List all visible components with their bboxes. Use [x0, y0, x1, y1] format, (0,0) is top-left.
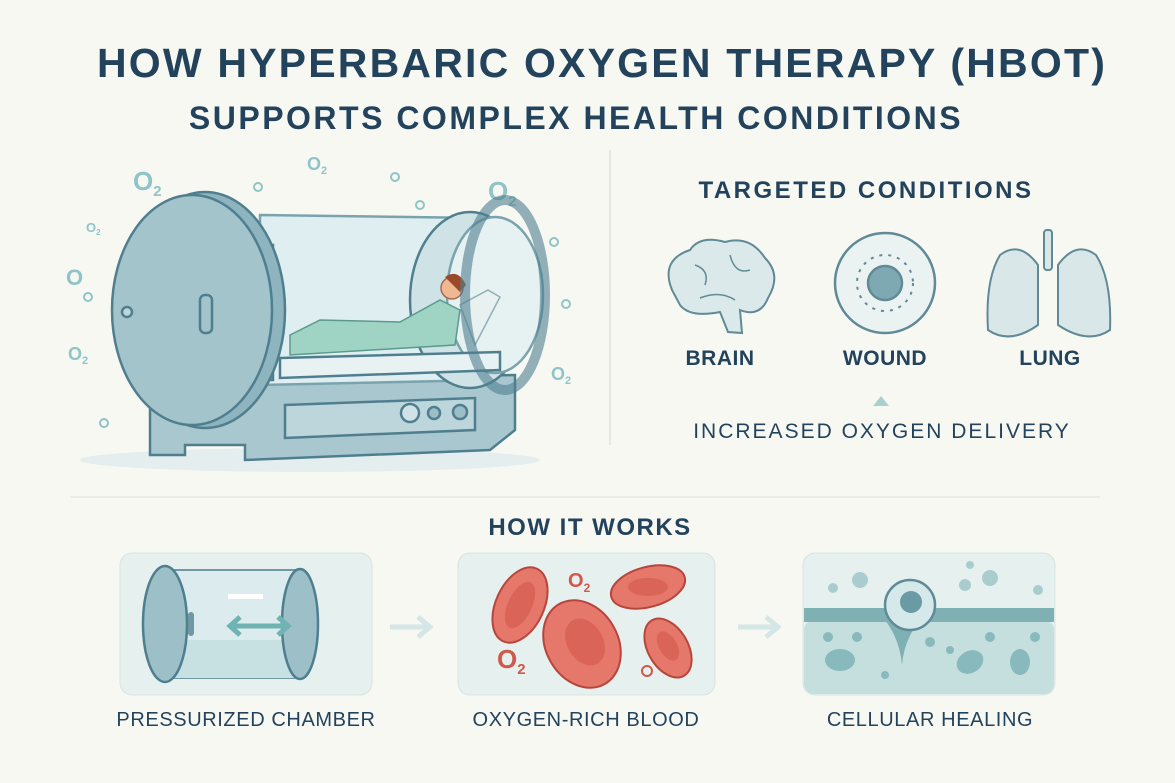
card: oxygen-rich blood	[458, 553, 715, 702]
card: pressurized chamber	[120, 553, 372, 695]
divider vertical	[609, 150, 611, 445]
illustration: hyperbaric chamber: O	[86, 220, 96, 235]
arrow 1	[390, 617, 430, 637]
rings and door	[465, 200, 545, 390]
divider horizontal	[70, 496, 1100, 498]
illustration: hyperbaric chamber: 2	[153, 183, 162, 200]
icon: wound	[835, 233, 935, 333]
card: oxygen-rich blood: O	[497, 644, 517, 674]
label: wound: WOUND	[843, 347, 927, 370]
illustration: hyperbaric chamber: O	[66, 265, 83, 290]
label: oxygen-rich blood: OXYGEN-RICH BLOOD	[473, 709, 699, 731]
heading: how it works: HOW IT WORKS	[488, 514, 692, 541]
illustration: hyperbaric chamber: 2	[321, 165, 327, 177]
card: oxygen-rich blood: 2	[584, 581, 591, 595]
illustration: hyperbaric chamber: O	[314, 262, 328, 282]
illustration: hyperbaric chamber: O	[68, 344, 82, 364]
tube	[260, 215, 490, 385]
title: HOW HYPERBARIC OXYGEN THERAPY (HBOT)	[97, 40, 1107, 86]
illustration: hyperbaric chamber	[66, 154, 571, 472]
illustration: hyperbaric chamber: O	[307, 154, 321, 174]
illustration: hyperbaric chamber: O	[551, 364, 565, 384]
label: lung: LUNG	[1019, 347, 1081, 370]
icon: lung	[988, 230, 1110, 336]
illustration: hyperbaric chamber: 2	[328, 273, 334, 285]
illustration: hyperbaric chamber: O	[133, 166, 153, 196]
icon: triangle	[873, 396, 889, 406]
card: cellular healing	[803, 553, 1055, 695]
heading: targeted conditions: TARGETED CONDITIONS	[698, 177, 1034, 204]
illustration: hyperbaric chamber: 2	[565, 375, 571, 387]
label: brain: BRAIN	[686, 347, 754, 370]
arrow 2	[738, 617, 778, 637]
label: pressurized chamber: PRESSURIZED CHAMBER	[116, 709, 376, 731]
illustration: hyperbaric chamber: 2	[82, 355, 88, 367]
card: oxygen-rich blood: O	[568, 570, 584, 592]
patient	[290, 300, 460, 355]
base	[150, 375, 515, 460]
illustration: hyperbaric chamber: 2	[508, 193, 517, 210]
illustration: hyperbaric chamber: O	[488, 176, 508, 206]
card: oxygen-rich blood: 2	[517, 661, 526, 678]
icon: brain	[669, 240, 774, 333]
label: cellular healing: CELLULAR HEALING	[827, 709, 1033, 731]
illustration: hyperbaric chamber: 2	[96, 228, 101, 237]
caption: increased oxygen delivery: INCREASED OXYGEN DELIVERY	[693, 420, 1071, 443]
subtitle: SUPPORTS COMPLEX HEALTH CONDITIONS	[189, 100, 963, 136]
